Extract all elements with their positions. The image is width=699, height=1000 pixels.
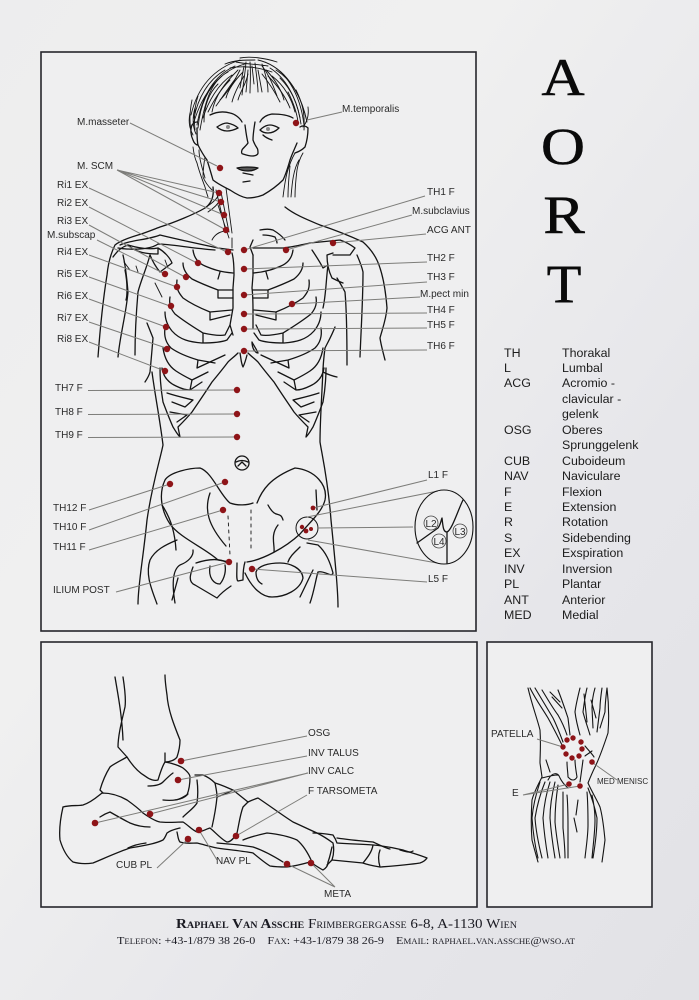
- lumbar inset: L2 L3 L4 magnifier: L3: [454, 527, 466, 538]
- legend of abbreviations: Anterior: [562, 593, 605, 607]
- label: Ri5 EX: [57, 269, 174, 309]
- label: TH2 F: TH2 F: [427, 253, 455, 264]
- pelvis and femurs: [148, 468, 333, 604]
- label: M.subclavius: [283, 206, 470, 253]
- label: META: [284, 860, 351, 900]
- label: L1 F: [311, 470, 448, 510]
- label: INV TALUS: INV TALUS: [308, 748, 359, 759]
- label: Ri1 EX: Ri1 EX: [57, 180, 88, 191]
- legend of abbreviations: gelenk: [562, 407, 599, 421]
- footer: address: Raphael Van Assche Frimbergergasse 6-8, A-1130 Wien: [176, 916, 518, 931]
- label: E: E: [512, 788, 519, 799]
- label: Ri3 EX: Ri3 EX: [57, 216, 88, 227]
- legend of abbreviations: ANT: [504, 593, 529, 607]
- label: TH11 F: [53, 507, 226, 553]
- label: TH9 F: [55, 430, 240, 441]
- label: M.subclavius: M.subclavius: [412, 206, 470, 217]
- label: Ri2 EX: Ri2 EX: [57, 198, 88, 209]
- legend of abbreviations: TH: [504, 346, 521, 360]
- label: M.subscap: [47, 230, 168, 277]
- label: Ri8 EX: Ri8 EX: [57, 334, 88, 345]
- label: PATELLA with ring of points: PATELLA: [491, 729, 534, 740]
- legend of abbreviations: OSG: [504, 423, 532, 437]
- foot bones drawing: [60, 675, 427, 870]
- label: E: [512, 781, 583, 799]
- label: M.pect min: M.pect min: [420, 289, 469, 300]
- label: TH8 F: [55, 407, 240, 418]
- label: TH10 F: TH10 F: [53, 522, 86, 533]
- sternum: [230, 253, 258, 367]
- label: MED MENISC: [589, 759, 648, 786]
- panel: foot acupoint chart: [41, 642, 477, 907]
- label: META: META: [324, 889, 351, 900]
- label: TH6 F: [241, 341, 455, 354]
- label: Ri7 EX: [57, 313, 170, 352]
- legend of abbreviations: S: [504, 531, 512, 545]
- legend of abbreviations: Medial: [562, 608, 599, 622]
- legend of abbreviations: ACG: [504, 376, 531, 390]
- label: ACG ANT: ACG ANT: [427, 225, 471, 236]
- torso labelled acupoints: [47, 104, 471, 596]
- legend of abbreviations: MED: [504, 608, 532, 622]
- neck, shoulders and arms: [98, 187, 387, 607]
- legend of abbreviations: F: [504, 485, 512, 499]
- label: Ri6 EX: Ri6 EX: [57, 291, 88, 302]
- legend of abbreviations: PL: [504, 577, 519, 591]
- navel: [235, 456, 249, 470]
- legend of abbreviations: EX: [504, 546, 521, 560]
- label: INV TALUS: [175, 748, 359, 783]
- label: TH3 F: TH3 F: [427, 272, 455, 283]
- label: TH5 F: TH5 F: [427, 320, 455, 331]
- head and hair drawing: [189, 57, 308, 198]
- label: ILIUM POST: ILIUM POST: [53, 585, 110, 596]
- label: Ri8 EX: [57, 334, 168, 374]
- label: ILIUM POST: [53, 559, 232, 596]
- label: PATELLA with ring of points: [491, 729, 585, 761]
- title: AORT vertical letters: T: [547, 255, 581, 315]
- legend of abbreviations: Thorakal: [562, 346, 610, 360]
- panel: torso acupoint chart: [41, 52, 476, 631]
- legend of abbreviations: INV: [504, 562, 525, 576]
- legend of abbreviations: L: [504, 361, 511, 375]
- label: TH1 F: [241, 187, 455, 253]
- label: M.masseter: [77, 117, 223, 171]
- legend of abbreviations: Inversion: [562, 562, 612, 576]
- label: TH12 F: TH12 F: [53, 503, 86, 514]
- label: TH7 F: TH7 F: [55, 383, 83, 394]
- label: TH7 F: [55, 383, 240, 394]
- label: TH12 F: [53, 481, 173, 514]
- legend of abbreviations: Plantar: [562, 577, 601, 591]
- legend of abbreviations: NAV: [504, 469, 529, 483]
- title: AORT vertical letters: R: [543, 185, 585, 245]
- label: TH2 F: [241, 253, 455, 272]
- legend of abbreviations: Lumbal: [562, 361, 603, 375]
- label: Ri3 EX: [57, 216, 189, 280]
- legend of abbreviations: Extension: [562, 500, 617, 514]
- label: M.subscap: M.subscap: [47, 230, 96, 241]
- label: Ri2 EX: [57, 198, 201, 266]
- legend of abbreviations: R: [504, 515, 513, 529]
- label: INV CALC: INV CALC: [308, 766, 354, 777]
- label: NAV PL: [196, 827, 251, 867]
- legend of abbreviations: Naviculare: [562, 469, 621, 483]
- rib cage left side: [160, 250, 238, 437]
- label: L1 F: L1 F: [428, 470, 448, 481]
- label: F TARSOMETA: [233, 786, 378, 839]
- label: TH3 F: [241, 272, 455, 298]
- label: Ri6 EX: [57, 291, 169, 330]
- label: TH6 F: TH6 F: [427, 341, 455, 352]
- label: M.temporalis: M.temporalis: [342, 104, 399, 115]
- label: TH4 F: [241, 305, 455, 317]
- label: TH8 F: TH8 F: [55, 407, 83, 418]
- label: M. SCM: [77, 161, 229, 233]
- legend of abbreviations: Exspiration: [562, 546, 623, 560]
- label: M.temporalis: [293, 104, 399, 126]
- label: ACG ANT: [330, 225, 471, 246]
- lumbar inset: L2 L3 L4 magnifier: [296, 490, 473, 564]
- title: AORT vertical letters: [541, 49, 585, 315]
- title: AORT vertical letters: O: [541, 119, 585, 176]
- label: L5 F: [249, 566, 448, 585]
- label: MED MENISC: MED MENISC: [597, 777, 648, 786]
- label: TH9 F: TH9 F: [55, 430, 83, 441]
- legend of abbreviations: Flexion: [562, 485, 602, 499]
- lumbar inset: L2 L3 L4 magnifier: L2: [425, 519, 437, 530]
- knee muscles drawing: [528, 688, 609, 862]
- legend of abbreviations: Cuboideum: [562, 454, 625, 468]
- rib cage right side: [248, 250, 326, 437]
- label: Ri4 EX: [57, 247, 180, 290]
- label: TH4 F: TH4 F: [427, 305, 455, 316]
- label: M.masseter: M.masseter: [77, 117, 130, 128]
- legend of abbreviations: Acromio -: [562, 376, 615, 390]
- label: CUB PL: [116, 836, 191, 871]
- legend of abbreviations: Rotation: [562, 515, 608, 529]
- title: AORT vertical letters: A: [541, 49, 585, 107]
- label: L5 F: L5 F: [428, 574, 448, 585]
- label: TH1 F: TH1 F: [427, 187, 455, 198]
- label: M. SCM: M. SCM: [77, 161, 113, 172]
- label: NAV PL: NAV PL: [216, 856, 251, 867]
- panel: knee acupoint chart: [487, 642, 652, 907]
- label: Ri5 EX: Ri5 EX: [57, 269, 88, 280]
- label: TH10 F: [53, 479, 228, 533]
- legend of abbreviations: [504, 346, 639, 622]
- legend of abbreviations: CUB: [504, 454, 530, 468]
- label: OSG: OSG: [308, 728, 330, 739]
- label: OSG: [178, 728, 330, 764]
- label: CUB PL: CUB PL: [116, 860, 153, 871]
- label: TH5 F: [241, 320, 455, 332]
- label: Ri1 EX: [57, 180, 231, 255]
- label: F TARSOMETA: F TARSOMETA: [308, 786, 378, 797]
- label: M.pect min: [289, 289, 469, 307]
- legend of abbreviations: Sprunggelenk: [562, 438, 639, 452]
- label: INV CALC: [92, 766, 354, 826]
- label: Ri4 EX: Ri4 EX: [57, 247, 88, 258]
- lumbar inset: L2 L3 L4 magnifier: L4: [433, 537, 445, 548]
- legend of abbreviations: Sidebending: [562, 531, 631, 545]
- label: TH11 F: TH11 F: [53, 542, 86, 553]
- legend of abbreviations: clavicular -: [562, 392, 621, 406]
- footer: contact details: Telefon: +43-1/879 38 26-0 Fax: +43-1/879 38 26-9 Email: raphael.van.assche@wso.at: [117, 935, 575, 947]
- legend of abbreviations: Oberes: [562, 423, 603, 437]
- legend of abbreviations: E: [504, 500, 512, 514]
- label: Ri7 EX: Ri7 EX: [57, 313, 88, 324]
